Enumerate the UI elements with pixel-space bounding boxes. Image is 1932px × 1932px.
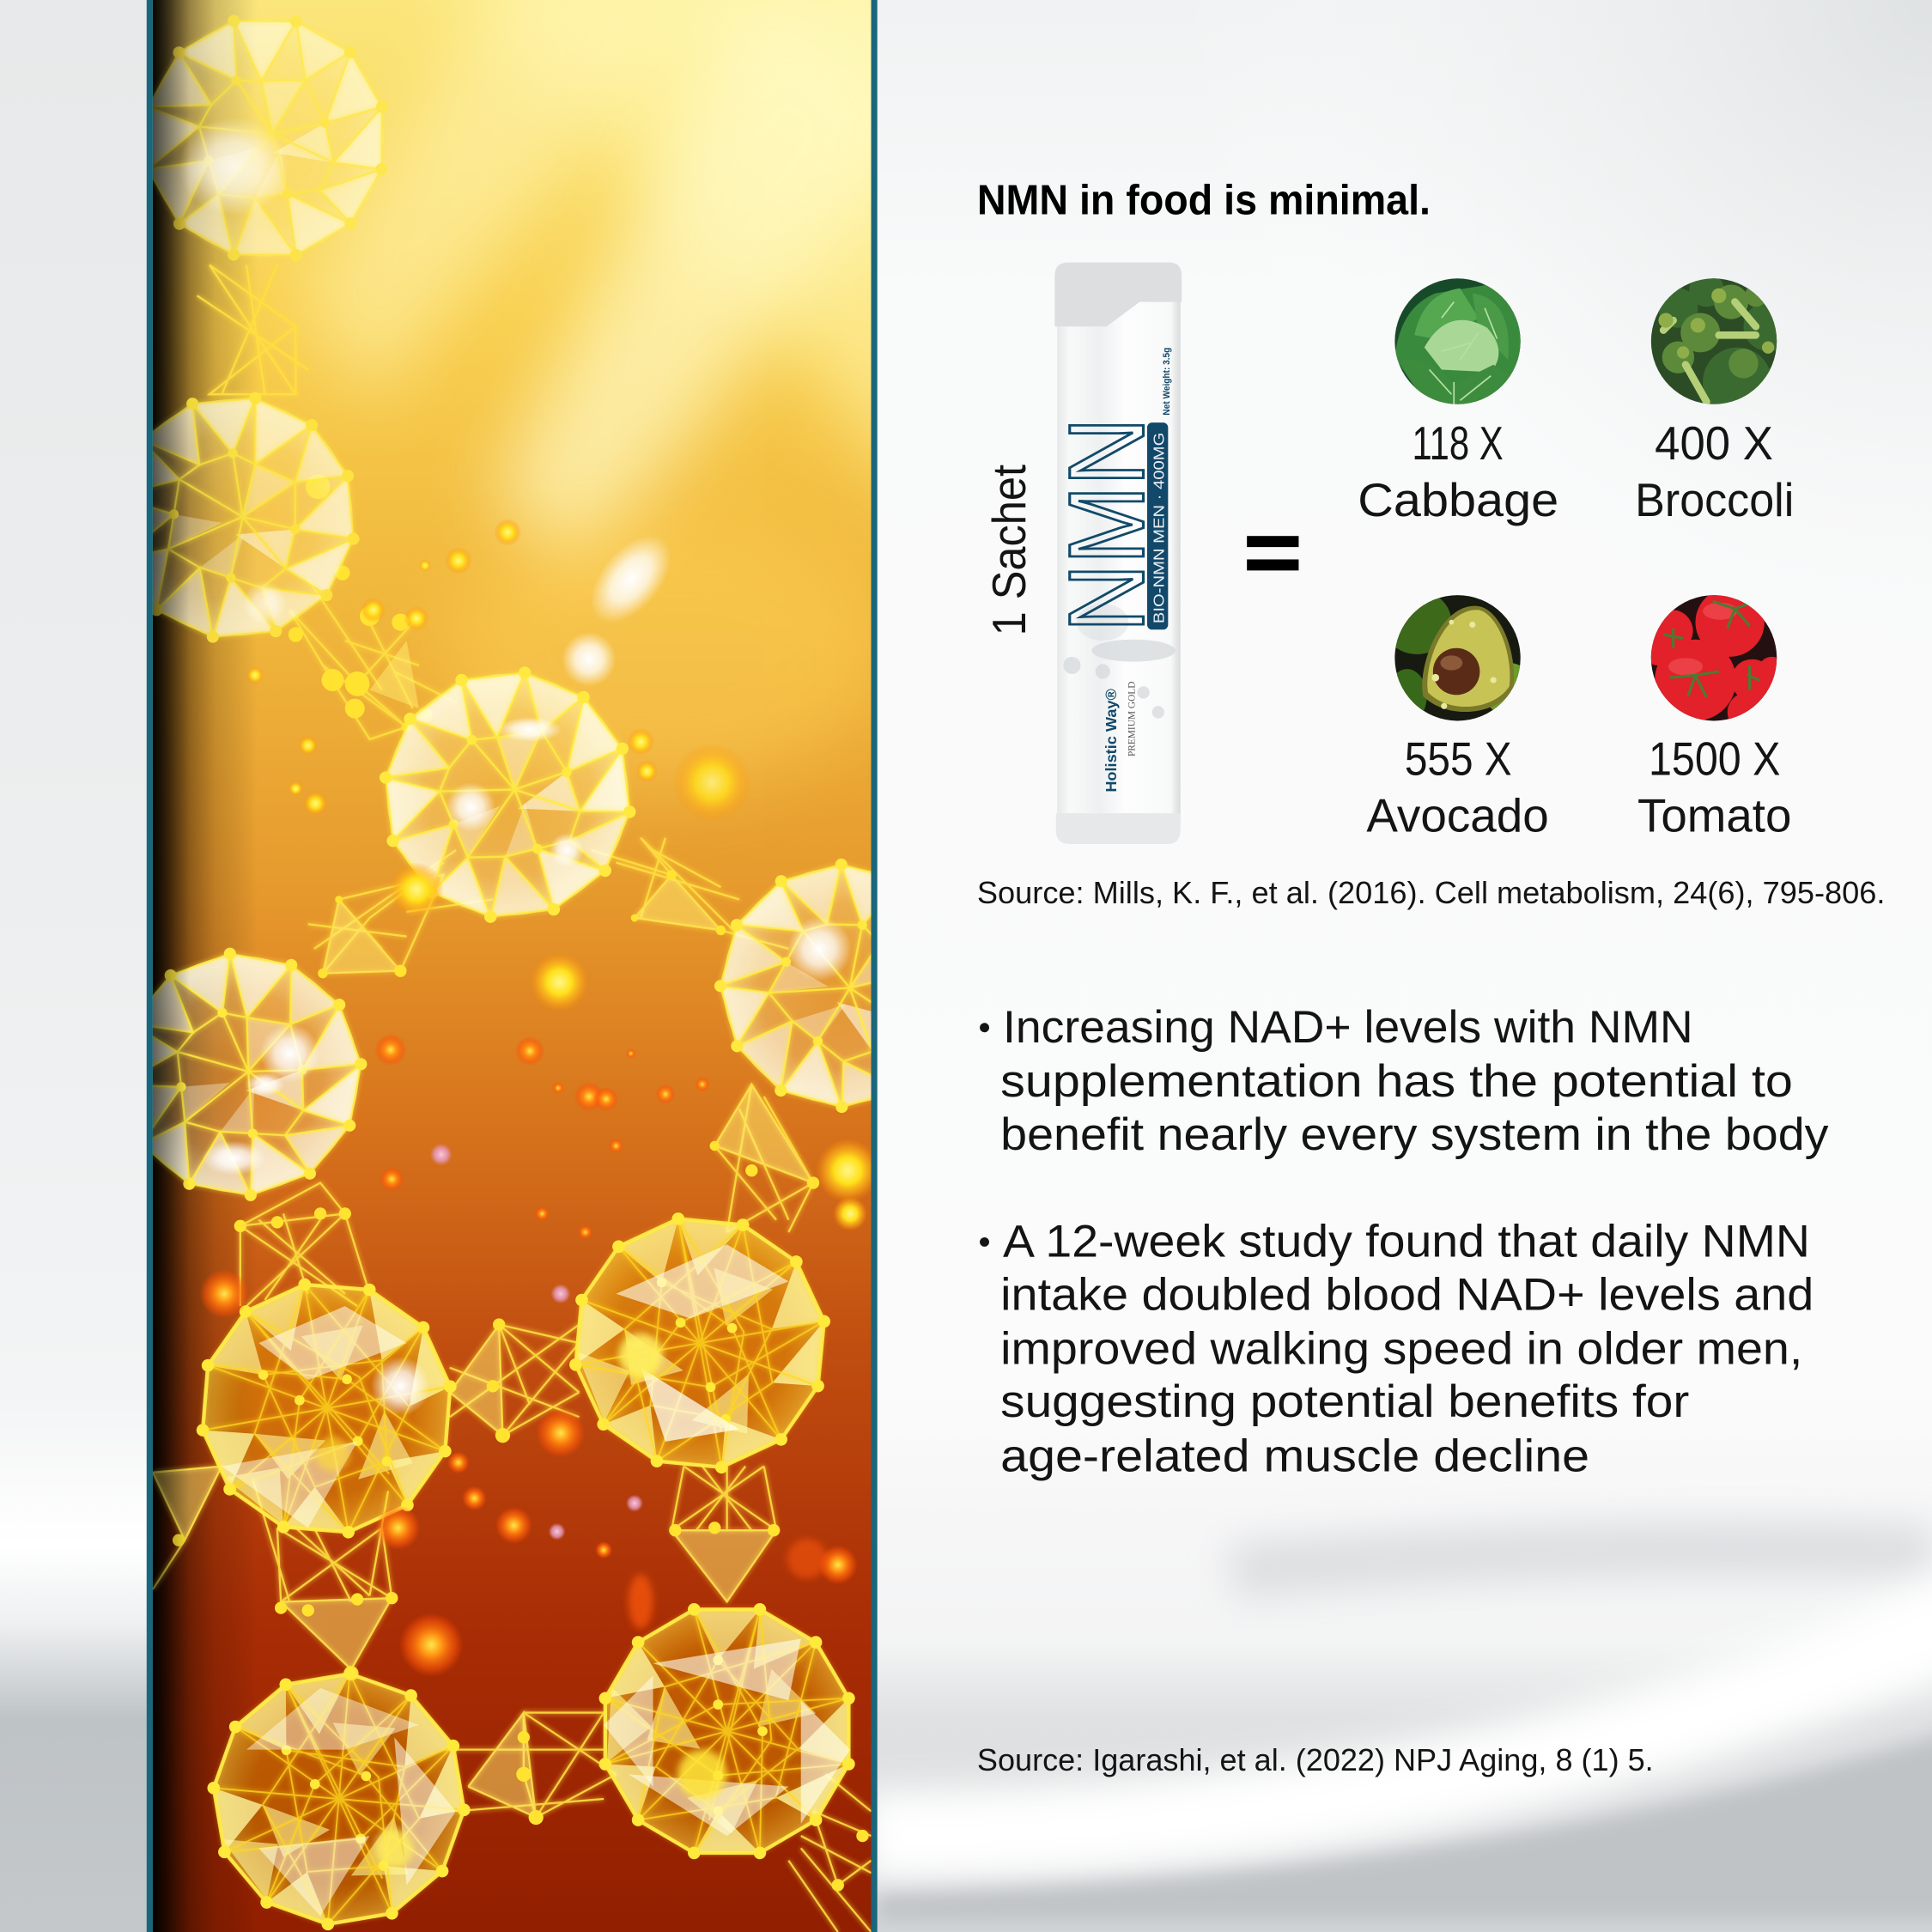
product: NMN sachet xyxy=(1048,263,1182,844)
broccoli name: Broccoli xyxy=(1635,474,1794,526)
white glints xyxy=(179,117,852,1868)
food labels xyxy=(1358,417,1794,842)
sachet bottom seal xyxy=(1056,813,1181,844)
icon: avocado xyxy=(1382,590,1534,723)
sachet top seal xyxy=(1054,263,1182,326)
connector nodes xyxy=(173,474,869,1892)
panel: golden molecular network image xyxy=(146,0,878,1932)
avocado quantity: 555 X xyxy=(1405,733,1512,786)
icon: tomato xyxy=(1645,587,1785,732)
bullet 2: intake doubled blood NAD+ levels and xyxy=(1000,1269,1814,1320)
bullet 2 xyxy=(980,1217,1814,1481)
equals sign xyxy=(1247,536,1298,570)
source: Mills: Source: Mills, K. F., et al. (2016). Cell metabolism, 24(6), 795-806. xyxy=(977,876,1885,910)
label: 1 Sachet: 1 Sachet xyxy=(983,465,1036,635)
tomato quantity: 1500 X xyxy=(1649,733,1781,786)
bullet 1: Increasing NAD+ levels with NMN xyxy=(1003,1002,1693,1053)
connectors between spheres xyxy=(153,265,872,1932)
light rays xyxy=(295,0,937,788)
left shadow xyxy=(153,0,258,1932)
tomato name: Tomato xyxy=(1637,790,1791,842)
sphere 8 xyxy=(599,1603,855,1860)
dose pill xyxy=(1147,422,1168,629)
bullet 1: supplementation has the potential to xyxy=(1000,1056,1793,1107)
heading: NMN in food is minimal. xyxy=(977,178,1431,224)
sphere overlays for lower spheres xyxy=(222,1244,850,1916)
sphere 3 xyxy=(380,666,635,923)
brand text: Holistic Way® xyxy=(1103,689,1120,793)
cabbage name: Cabbage xyxy=(1358,474,1558,526)
bullet 1: benefit nearly every system in the body xyxy=(1000,1109,1829,1160)
icon: broccoli xyxy=(1649,272,1793,416)
bullet 2: suggesting potential benefits for xyxy=(1000,1376,1689,1427)
panel gradient xyxy=(153,0,872,1932)
source: Igarashi: Source: Igarashi, et al. (2022) NPJ Aging, 8 (1) 5. xyxy=(977,1743,1654,1777)
icon: cabbage xyxy=(1392,276,1523,409)
bullet 2: improved walking speed in older men, xyxy=(1000,1323,1802,1374)
sphere 4 xyxy=(714,859,871,1113)
bullet 2: A 12-week study found that daily NMN xyxy=(1003,1217,1810,1267)
panel frame xyxy=(147,0,878,1932)
NMN logo: NMN xyxy=(1048,417,1167,632)
sphere 1 xyxy=(153,15,388,261)
connector fills xyxy=(153,641,813,1818)
bullet 2: age-related muscle decline xyxy=(1000,1431,1589,1481)
watermark root xyxy=(1063,604,1176,719)
sphere 7 xyxy=(196,1278,457,1539)
net weight text: Net Weight: 3.5g xyxy=(1162,348,1172,416)
sphere 5 xyxy=(153,948,368,1201)
broccoli quantity: 400 X xyxy=(1655,417,1773,470)
sphere 6 xyxy=(569,1212,831,1473)
dose text: BIO-NMN MEN · 400MG xyxy=(1150,433,1167,623)
bokeh particles xyxy=(199,519,880,1677)
avocado name: Avocado xyxy=(1366,790,1549,842)
sub-brand text: PREMIUM GOLD xyxy=(1127,682,1138,756)
sphere 2 xyxy=(153,392,359,643)
cabbage quantity: 118 X xyxy=(1412,417,1504,470)
left edge shading xyxy=(153,0,190,1932)
bullet 1 xyxy=(980,1002,1829,1160)
sachet body xyxy=(1057,295,1181,825)
sphere 9 xyxy=(196,1656,482,1932)
